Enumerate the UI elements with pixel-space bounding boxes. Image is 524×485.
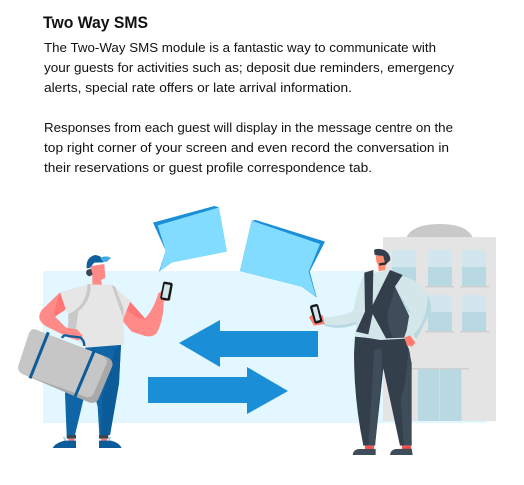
- guest phone: [160, 282, 173, 301]
- intro paragraph: your guests for activities such as; deposit due reminders, emergency: [44, 60, 455, 75]
- hotel staff figure with headset and phone: [309, 249, 431, 455]
- guest right arm: [122, 289, 171, 336]
- guest left arm: [39, 292, 83, 341]
- staff shoes: [353, 446, 413, 455]
- title: Two Way SMS: [43, 14, 148, 32]
- staff waistcoat: [356, 270, 409, 338]
- hotel building: [383, 224, 496, 421]
- arrow: pointing right: [148, 367, 288, 414]
- suitcase: [18, 329, 113, 403]
- staff head and hair: [374, 249, 390, 271]
- backpack straps: [68, 284, 124, 330]
- speech bubble: right: [240, 220, 325, 297]
- intro paragraph: alerts, special rate offers or late arrival information.: [44, 80, 352, 95]
- intro paragraph: [44, 40, 455, 95]
- staff shirt and sleeves: [324, 270, 431, 340]
- guest head and cap: [86, 255, 111, 285]
- guest shoes: [53, 435, 122, 448]
- staff hands: [309, 314, 415, 347]
- pale blue background panel: [43, 271, 487, 423]
- guest legs: [65, 344, 121, 435]
- responses paragraph: Responses from each guest will display in the message centre on the: [44, 120, 453, 135]
- speech bubble: left: [153, 206, 227, 272]
- responses paragraph: their reservations or guest profile correspondence tab.: [44, 160, 372, 175]
- guest figure with suitcase and phone: [18, 255, 173, 448]
- staff phone: [310, 304, 322, 324]
- arrow: pointing left: [179, 320, 318, 367]
- intro paragraph: The Two-Way SMS module is a fantastic way to communicate with: [44, 40, 436, 55]
- guest shirt: [60, 284, 131, 348]
- staff trousers: [354, 337, 412, 446]
- responses paragraph: top right corner of your screen and even record the conversation in: [44, 140, 449, 155]
- responses paragraph: [44, 120, 453, 175]
